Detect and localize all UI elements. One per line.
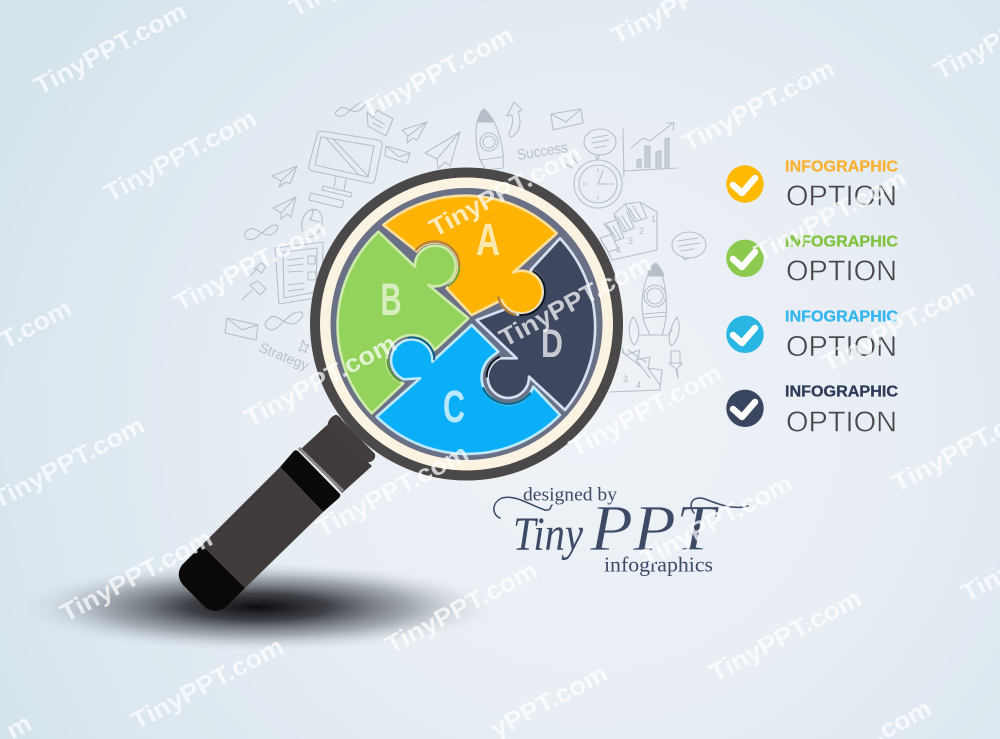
doodle: envelope top right: [551, 109, 583, 130]
watermarks: TinyPPT.com: [381, 556, 542, 660]
watermarks: TinyPPT.com: [636, 469, 797, 573]
doodle: paper planes left: [272, 166, 297, 219]
puzzle letter B: B: [380, 274, 402, 325]
watermarks: TinyPPT.com: [425, 139, 586, 243]
watermarks: TinyPPT.com: [127, 632, 288, 736]
legend item 2: OPTION: [786, 256, 897, 288]
doodle: stairs top right: 3: [628, 236, 633, 246]
puzzle piece D: [477, 238, 595, 410]
doodle: infinity and pins left: [242, 225, 278, 300]
logo: designed by TinyPPT infographics: Tiny: [513, 508, 584, 561]
doodle: pin right: [669, 351, 682, 378]
legend item 3: OPTION: [786, 331, 897, 363]
watermarks: TinyPPT.com: [56, 524, 217, 628]
puzzle knob shadows: [388, 241, 545, 404]
doodle: stairs top right: 4: [616, 245, 621, 255]
legend item 3: [726, 308, 898, 363]
handle: black band: [280, 450, 340, 512]
doodle: clipboard: [275, 242, 323, 304]
logo: designed by TinyPPT infographics: PPT: [589, 492, 720, 565]
doodle: stairs top right: 2: [639, 226, 644, 236]
legend item 2: [726, 234, 898, 288]
logo: designed by TinyPPT infographics: infographics: [604, 552, 713, 576]
doodle: monitor: [309, 131, 382, 197]
doodle: keyboard and mouse: [299, 193, 344, 239]
doodle: speech bubble top: [584, 129, 616, 160]
legend item 4: OPTION: [786, 406, 897, 438]
puzzle letter A: A: [476, 214, 500, 265]
doodle: rocket right: [629, 263, 679, 346]
doodle: infinity bottom: [265, 312, 309, 353]
doodle: bar chart: [623, 123, 677, 177]
doodle: envelope bottom left: [225, 318, 258, 340]
watermarks: TinyPPT.com: [750, 164, 911, 268]
legend item 1: OPTION: [786, 180, 897, 212]
watermarks: TinyPPT.com: [818, 274, 979, 378]
legend item 3: INFOGRAPHIC: [785, 308, 898, 326]
doodle: stairs top right: 1: [651, 214, 656, 224]
logo: designed by TinyPPT infographics: [494, 484, 748, 576]
doodle: arrow: [507, 102, 522, 137]
doodle: paper planes and envelope top: [385, 122, 460, 169]
watermarks: TinyPPT.com: [565, 359, 726, 463]
doodle: stairs bottom right: 4: [636, 380, 641, 390]
doodle: rocket top: [476, 109, 503, 170]
doodle: stairs top right: [600, 202, 657, 260]
jigsaw puzzle: [338, 196, 595, 454]
handle: metal ring: [299, 448, 343, 491]
watermarks: TinyPPT.com: [100, 104, 261, 208]
legend item 4: [726, 384, 898, 438]
puzzle letter D: D: [541, 322, 563, 366]
watermarks: TinyPPT.com: [30, 0, 191, 101]
logo: designed by TinyPPT infographics: designed by: [523, 484, 618, 506]
doodle: Strategy word: Strategy: [257, 339, 311, 373]
legend item 1: INFOGRAPHIC: [785, 158, 898, 176]
watermarks: TinyPPT.com: [170, 214, 331, 318]
legend item 1: [726, 158, 898, 212]
legend item 4: INFOGRAPHIC: [785, 384, 898, 400]
handle: black end cap: [179, 545, 245, 611]
handle: neck: [301, 425, 372, 493]
watermarks: TinyPPT.com: [357, 21, 518, 125]
doodle: clock: [566, 155, 622, 208]
handle: grey body: [202, 467, 323, 588]
watermarks: TinyPPT.com: [495, 249, 656, 353]
doodle: stairs bottom right: [610, 348, 662, 392]
doodle: infinity top and note: [335, 102, 393, 136]
doodle: speech bubble right: [672, 232, 706, 260]
watermarks: TinyPPT.com: [678, 54, 839, 158]
magnifier handle: [179, 415, 375, 611]
magnifier lens rings: [310, 168, 623, 480]
doodle: stairs bottom right: 3: [623, 374, 628, 384]
doodle: Success word: Success: [516, 139, 569, 164]
watermarks: TinyPPT.com: [705, 584, 866, 688]
handle shadow: [23, 563, 493, 651]
puzzle letter C: C: [443, 381, 465, 432]
doodle sketches around the lens: [225, 102, 706, 392]
legend item 2: INFOGRAPHIC: [785, 234, 898, 250]
handle: collar: [328, 415, 375, 463]
watermarks: TinyPPT.com: [312, 439, 473, 543]
puzzle piece C: [377, 325, 560, 454]
puzzle piece A: [383, 196, 557, 315]
watermarks: TinyPPT.com: [240, 329, 401, 433]
puzzle piece B: [338, 232, 468, 413]
